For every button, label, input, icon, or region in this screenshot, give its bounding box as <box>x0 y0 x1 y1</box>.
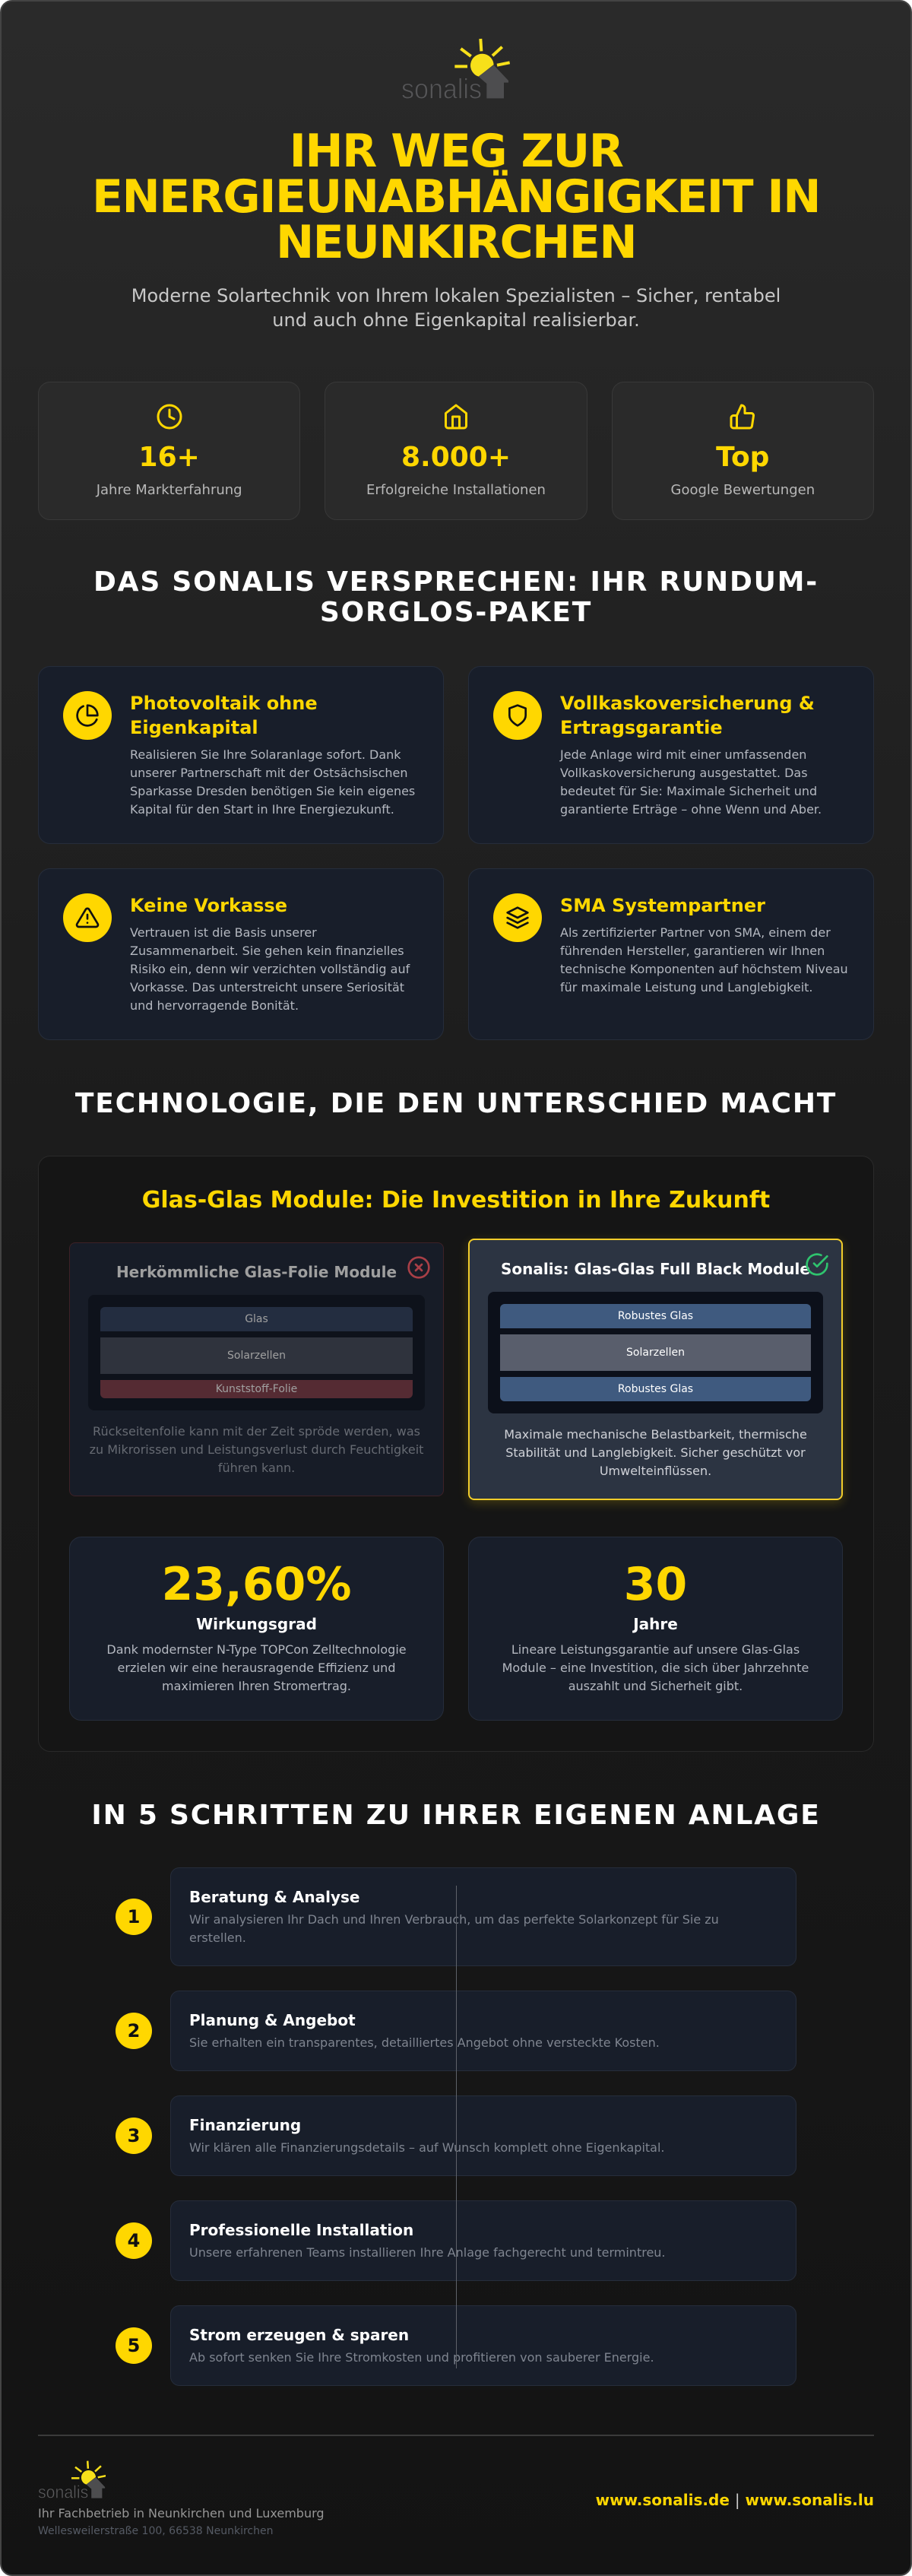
key figure: 30 Jahre: Lineare Leistungsgarantie auf unsere Glas-Glas Module – eine Investition, die sich über Jahrzehnte auszahlt und Sicherheit gibt. <box>502 1642 809 1693</box>
footer company text: Ihr Fachbetrieb in Neunkirchen und Luxemburg <box>38 2506 325 2520</box>
layer diagram: Glas-Glas <box>488 1292 823 1413</box>
stat card: Google Bewertungen: Google Bewertungen <box>671 482 815 498</box>
card: Glas-Folie module: Rückseitenfolie kann mit der Zeit spröde werden, was zu Mikrorissen und Leistungsverlust durch Feuchtigkeit führen kann. <box>90 1424 423 1475</box>
feature card: Keine Vorkasse <box>38 868 444 1040</box>
step 3: 3 <box>128 2125 140 2146</box>
step 5: 5 <box>128 2335 140 2356</box>
stat card: Google Bewertungen: Top <box>716 442 769 473</box>
stat card: Installationen <box>325 382 587 520</box>
title: ENERGIEUNABHÄNGIGKEIT IN <box>92 170 820 224</box>
step 3 <box>116 2095 796 2176</box>
layer diagram: Glas-Glas: Robustes Glas <box>618 1310 693 1322</box>
subtitle <box>131 285 781 331</box>
feature card: Keine Vorkasse: Keine Vorkasse <box>130 895 287 916</box>
icon: check circle <box>806 1253 828 1276</box>
step 1: Wir analysieren Ihr Dach und Ihren Verbrauch, um das perfekte Solarkonzept für Sie zu erstellen. <box>189 1912 719 1945</box>
title: NEUNKIRCHEN <box>276 216 636 269</box>
card: Glas-Glas Full Black module <box>468 1239 843 1500</box>
step 4: Unsere erfahrenen Teams installieren Ihre Anlage fachgerecht und termintreu. <box>189 2245 666 2260</box>
timeline connector line <box>456 1886 457 2368</box>
heading: Technologie: TECHNOLOGIE, DIE DEN UNTERSCHIED MACHT <box>75 1088 837 1119</box>
card: Glas-Folie module <box>69 1242 444 1496</box>
step 5: Strom erzeugen & sparen <box>189 2326 409 2344</box>
feature card: Photovoltaik ohne Eigenkapital <box>38 666 444 844</box>
key figure: Wirkungsgrad <box>69 1537 444 1721</box>
title <box>92 125 820 269</box>
footer company text: Wellesweilerstraße 100, 66538 Neunkirchen <box>38 2525 273 2537</box>
heading: Das Sonalis Versprechen <box>93 566 819 628</box>
stat card: Installationen: Erfolgreiche Installationen <box>366 482 546 498</box>
layer diagram: Glas-Folie: Kunststoff-Folie <box>216 1383 297 1395</box>
heading: Das Sonalis Versprechen: SORGLOS-PAKET <box>320 597 592 628</box>
step 4: 4 <box>128 2230 140 2251</box>
card: Glas-Glas Full Black module: Sonalis: Glas-Glas Full Black Module <box>501 1260 810 1278</box>
step 1 <box>116 1867 796 1966</box>
key figure: Wirkungsgrad: Wirkungsgrad <box>196 1615 317 1633</box>
layer diagram: Glas-Folie: Solarzellen <box>227 1350 286 1362</box>
logo: sonalis header <box>401 38 510 99</box>
step 2: Planung & Angebot <box>189 2011 356 2029</box>
key figures grid <box>69 1537 843 1721</box>
feature card: SMA Systempartner: SMA Systempartner <box>560 895 765 916</box>
step 5 <box>116 2305 796 2386</box>
timeline: five steps <box>116 1867 796 2386</box>
key figure: Wirkungsgrad: Dank modernster N-Type TOPCon Zelltechnologie erzielen wir eine herausragende Effizienz und maximieren Ihren Stromertrag. <box>106 1642 407 1693</box>
step 2: 2 <box>128 2020 140 2041</box>
comparison grid <box>69 1237 847 1508</box>
feature card: Vollkaskoversicherung: Jede Anlage wird mit einer umfassenden Vollkaskoversicherung ausgestattet. Das bedeutet für Sie: Maximale Sicherheit und garantierte Erträge – ohne Wenn und Aber. <box>560 747 822 817</box>
key figure: Wirkungsgrad: 23,60% <box>162 1558 351 1611</box>
stat card: Jahre Markterfahrung: 16+ <box>139 442 200 473</box>
step 3: Wir klären alle Finanzierungsdetails – auf Wunsch komplett ohne Eigenkapital. <box>189 2140 664 2155</box>
feature card: Vollkaskoversicherung: Vollkaskoversicherung & Ertragsgarantie <box>560 693 815 738</box>
stat card: Jahre Markterfahrung: Jahre Markterfahrung <box>97 482 242 498</box>
panel heading: Glas-Glas Module: Die Investition in Ihre Zukunft <box>142 1187 770 1213</box>
title: IHR WEG ZUR <box>290 125 622 178</box>
step 4 <box>116 2200 796 2281</box>
card: Glas-Folie module: Herkömmliche Glas-Folie Module <box>116 1263 397 1281</box>
footer logo <box>38 2460 106 2498</box>
step 4: Professionelle Installation <box>189 2221 413 2239</box>
step 2 <box>116 1991 796 2071</box>
stat card: Google Bewertungen <box>612 382 874 520</box>
layer diagram: Glas-Glas: Solarzellen <box>626 1347 685 1359</box>
footer links: www.sonalis.de | www.sonalis.lu <box>596 2491 874 2509</box>
step 5: Ab sofort senken Sie Ihre Stromkosten und profitieren von sauberer Energie. <box>189 2350 654 2365</box>
step 1: 1 <box>128 1906 140 1927</box>
subtitle: und auch ohne Eigenkapital realisierbar. <box>272 309 640 331</box>
subtitle: Moderne Solartechnik von Ihrem lokalen Spezialisten – Sicher, rentabel <box>131 285 781 306</box>
feature card: Keine Vorkasse: Vertrauen ist die Basis unserer Zusammenarbeit. Sie gehen kein finanzielles Risiko ein, denn wir verzichten vollständig auf Vorkasse. Das unterstreicht unsere Seriosität und hervorragende Bonität. <box>130 925 410 1013</box>
feature card: SMA Systempartner <box>468 868 874 1040</box>
layer diagram: Glas-Folie: Glas <box>245 1313 268 1325</box>
heading: In 5 Schritten: IN 5 SCHRITTEN ZU IHRER EIGENEN ANLAGE <box>91 1800 821 1831</box>
step 2: Sie erhalten ein transparentes, detailliertes Angebot ohne versteckte Kosten. <box>189 2035 660 2050</box>
feature card: Photovoltaik ohne Eigenkapital: Realisieren Sie Ihre Solaranlage sofort. Dank unserer Partnerschaft mit der Ostsächsischen Sparkasse Dresden benötigen Sie kein eigenes Kapital für den Start in Ihre Energiezukunft. <box>130 747 415 817</box>
step 1: Beratung & Analyse <box>189 1888 359 1906</box>
stat card: Installationen: 8.000+ <box>401 442 511 473</box>
feature card: Vollkaskoversicherung <box>468 666 874 844</box>
stat card: Jahre Markterfahrung <box>38 382 300 520</box>
feature card: Photovoltaik ohne Eigenkapital: Photovoltaik ohne Eigenkapital <box>130 693 318 738</box>
feature card: SMA Systempartner: Als zertifizierter Partner von SMA, einem der führenden Hersteller, garantieren wir Ihnen technische Komponenten auf höchstem Niveau für maximale Leistung und Langlebigkeit. <box>560 925 848 995</box>
footer company text <box>38 2506 325 2537</box>
step 3: Finanzierung <box>189 2116 301 2134</box>
key figure: 30 Jahre: Jahre <box>633 1615 678 1633</box>
layer diagram: Glas-Glas: Robustes Glas <box>618 1383 693 1395</box>
key figure: 30 Jahre: 30 <box>624 1558 687 1611</box>
icon: x circle <box>407 1256 430 1279</box>
panel: Glas-Glas Module <box>38 1156 874 1752</box>
heading: Das Sonalis Versprechen: DAS SONALIS VERSPRECHEN: IHR RUNDUM- <box>93 566 819 598</box>
layer diagram: Glas-Folie <box>88 1295 425 1410</box>
key figure: 30 Jahre <box>468 1537 843 1721</box>
card: Glas-Glas Full Black module: Maximale mechanische Belastbarkeit, thermische Stabilität und Langlebigkeit. Sicher geschützt vor Umwelteinflüssen. <box>504 1427 807 1478</box>
